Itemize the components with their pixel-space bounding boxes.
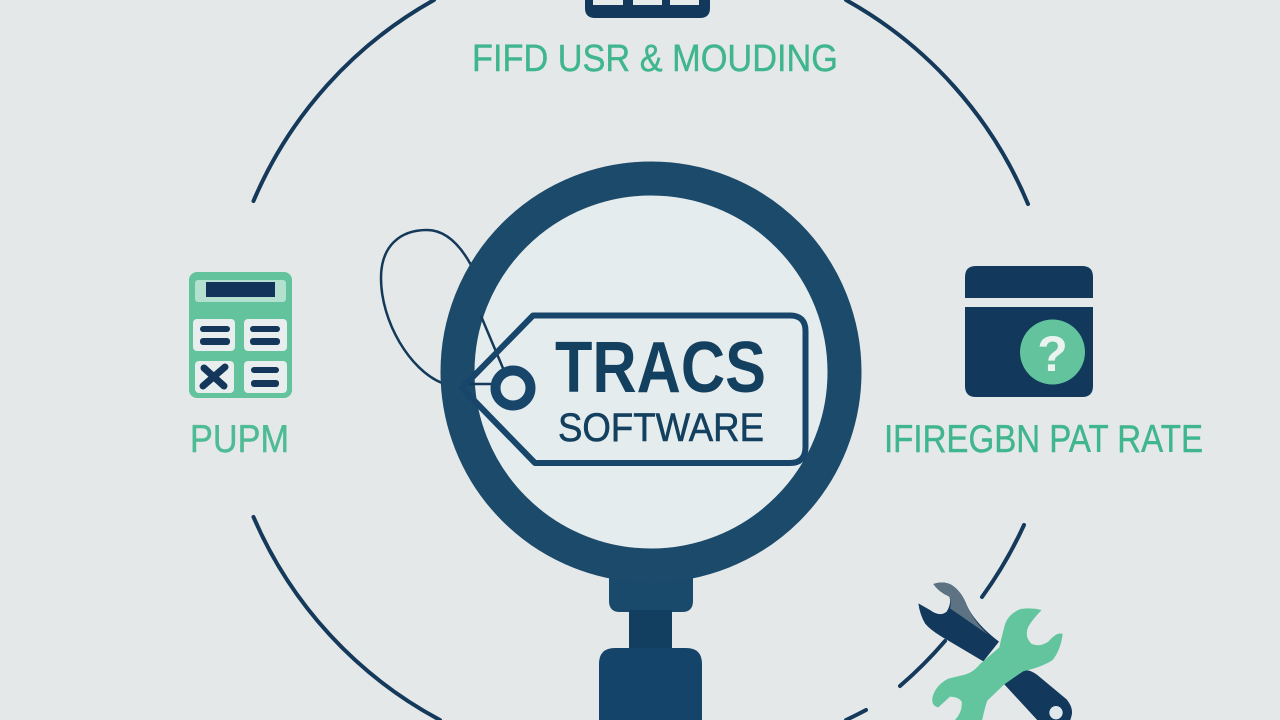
heading: top label: FIFD USR & MOUDING xyxy=(472,38,838,80)
icon: calculator xyxy=(189,272,292,398)
tag eyelet xyxy=(496,370,530,406)
tag subtitle: SOFTWARE xyxy=(558,406,764,450)
label: window icon: IFIREGBN PAT RATE xyxy=(884,418,1203,461)
dark wrench xyxy=(918,583,1072,720)
icon: tag string loop xyxy=(381,230,471,383)
icon: crossed wrenches xyxy=(918,583,1072,720)
icon: window with question mark xyxy=(965,266,1093,397)
magnifier lens and ring xyxy=(458,178,844,566)
magnifying glass xyxy=(458,178,844,720)
tag string inside lens xyxy=(462,316,505,384)
tag outline xyxy=(462,316,806,463)
icon: window with question mark: ? xyxy=(1037,326,1068,382)
icon: top window panel xyxy=(585,0,710,18)
green wrench xyxy=(932,608,1063,720)
magnifier handle xyxy=(599,570,702,720)
outer cycle ring arcs xyxy=(254,0,1028,720)
price tag xyxy=(462,316,806,463)
tag title: TRACS xyxy=(555,328,766,408)
label: calculator: PUPM xyxy=(190,418,289,461)
